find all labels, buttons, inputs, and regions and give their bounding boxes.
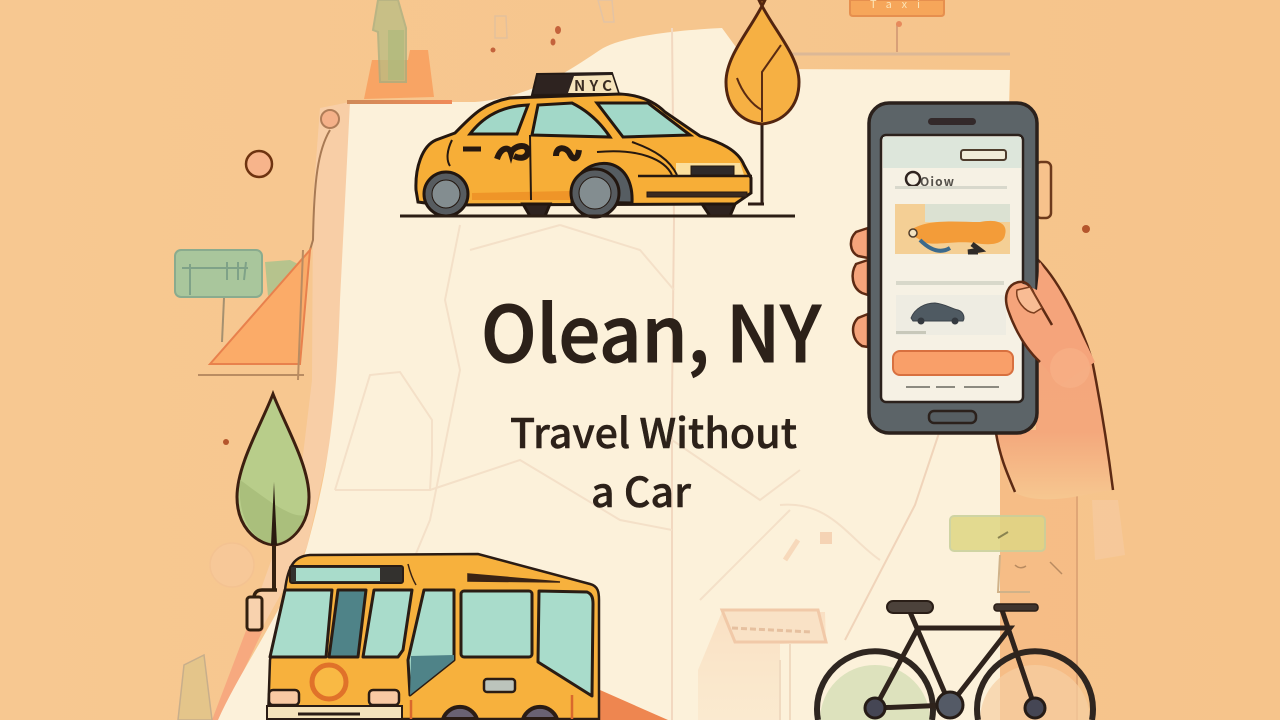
- bike handlebars: [994, 604, 1038, 611]
- bus windows: [270, 590, 593, 696]
- screen logo: [895, 172, 1007, 190]
- icon: orange tree: [726, 0, 799, 204]
- taxi roof sign: [532, 73, 619, 96]
- bus mirror: [247, 590, 277, 630]
- panel: soft peach band behind map: [247, 100, 360, 628]
- icon: orange ground wedge: [600, 690, 668, 720]
- phone screen: [881, 135, 1023, 402]
- bus headlight ring: [312, 665, 346, 699]
- fingers left: [851, 228, 868, 347]
- icon: bus: [247, 554, 599, 719]
- bus top window: [290, 566, 403, 583]
- screen car card: [896, 295, 1006, 335]
- taxi wheels: [424, 163, 735, 217]
- phone body: [869, 103, 1037, 433]
- icon: taxi: [416, 73, 752, 217]
- map road lines: [335, 28, 950, 720]
- icon: faint bottom left plant: [178, 655, 212, 720]
- icon: orange sign top right: [750, 0, 1010, 54]
- bus wheels: [443, 707, 557, 719]
- screen logo: Qiow: [920, 173, 954, 190]
- subtitle line one: Travel Without: [510, 400, 797, 460]
- road line: [400, 214, 795, 218]
- bus door handle: [484, 679, 515, 692]
- bus body: [268, 554, 599, 719]
- bus bumper: [267, 706, 402, 719]
- screen hero image: [895, 204, 1010, 254]
- title: Olean, NY: [481, 274, 821, 385]
- taxi details: [448, 135, 752, 200]
- taxi lower shade: [472, 191, 570, 200]
- icon: faint house: [698, 532, 832, 720]
- taxi body: [416, 94, 751, 205]
- phone speaker: [928, 118, 976, 125]
- side button: [1036, 162, 1051, 218]
- taxi headlight: [676, 163, 744, 175]
- screen footer: [906, 386, 999, 388]
- screen button: [893, 351, 1013, 375]
- panel: map sheet: [218, 28, 1010, 720]
- taxi roof sign: NYC: [574, 75, 612, 96]
- small dots: [223, 225, 1090, 445]
- bike frame: [875, 610, 1035, 708]
- icon: faint circle: [210, 543, 254, 587]
- taxi windows: [470, 103, 690, 137]
- thumb: [1006, 262, 1095, 385]
- divider line right: [1076, 495, 1078, 720]
- panel: orange strip lower left: [212, 628, 264, 720]
- hand palm: [996, 258, 1113, 499]
- icon: hand holding phone: [851, 103, 1113, 499]
- subtitle line two: a Car: [591, 459, 691, 519]
- screen divider: [896, 281, 1004, 285]
- panel: right peach band: [1000, 440, 1078, 720]
- icon: road sign bottom right: [950, 516, 1062, 592]
- bike saddle: [887, 601, 933, 613]
- bike hubs: [865, 692, 1045, 718]
- icon: left circle: [246, 151, 272, 177]
- bus lights: [269, 690, 399, 705]
- bus panel lines: [411, 695, 572, 719]
- icon: green sign with triangle: [175, 250, 310, 380]
- screen header: [883, 137, 1021, 168]
- faint marks top center: [490, 0, 614, 52]
- icon: bicycle: [817, 601, 1093, 720]
- icon: pin and route line: [310, 110, 339, 250]
- faint shape right: [1092, 500, 1125, 560]
- screen search pill: [961, 150, 1006, 160]
- icon: green tree: [237, 394, 309, 590]
- bus roof vent: [468, 574, 560, 582]
- bike wheels: [817, 651, 1093, 720]
- phone home button: [929, 411, 976, 423]
- icon: top left faint cone and marker: [347, 0, 452, 104]
- bike wheel tints: [820, 665, 1090, 720]
